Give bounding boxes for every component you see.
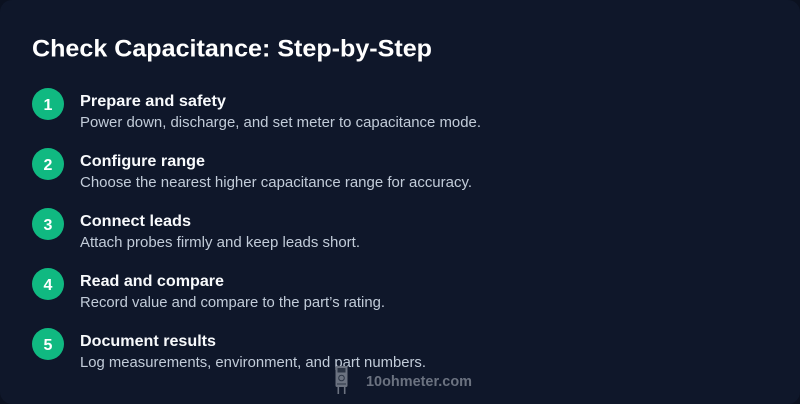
step 1 badge: [32, 88, 64, 120]
step 5: [32, 328, 426, 371]
step 1 heading: Prepare and safety: [80, 93, 226, 110]
icon: multimeter: [336, 366, 348, 394]
step 5 heading: Document results: [80, 333, 216, 350]
step 3 badge: 3: [44, 217, 53, 234]
step 5 description: Log measurements, environment, and part numbers.: [80, 355, 426, 371]
step 2 badge: [32, 148, 64, 180]
step 1: [32, 88, 481, 131]
step 3 description: Attach probes firmly and keep leads short.: [80, 235, 360, 251]
step 2 heading: Configure range: [80, 153, 205, 170]
step 4 badge: [32, 268, 64, 300]
step 5 badge: [32, 328, 64, 360]
watermark text: 10ohmeter.com: [366, 374, 472, 390]
step 4: [32, 268, 385, 311]
step 2: [32, 148, 472, 191]
step 1 description: Power down, discharge, and set meter to capacitance mode.: [80, 115, 481, 131]
step 4 badge: 4: [44, 277, 53, 294]
step 4 description: Record value and compare to the part’s rating.: [80, 295, 385, 311]
title: Check Capacitance: Step-by-Step: [32, 36, 432, 62]
step 3: [32, 208, 360, 251]
step 2 badge: 2: [44, 157, 53, 174]
step 4 heading: Read and compare: [80, 273, 224, 290]
step 3 badge: [32, 208, 64, 240]
step 1 badge: 1: [44, 97, 53, 114]
watermark: [336, 366, 472, 394]
step 2 description: Choose the nearest higher capacitance range for accuracy.: [80, 175, 472, 191]
step 5 badge: 5: [44, 337, 53, 354]
step 3 heading: Connect leads: [80, 213, 191, 230]
